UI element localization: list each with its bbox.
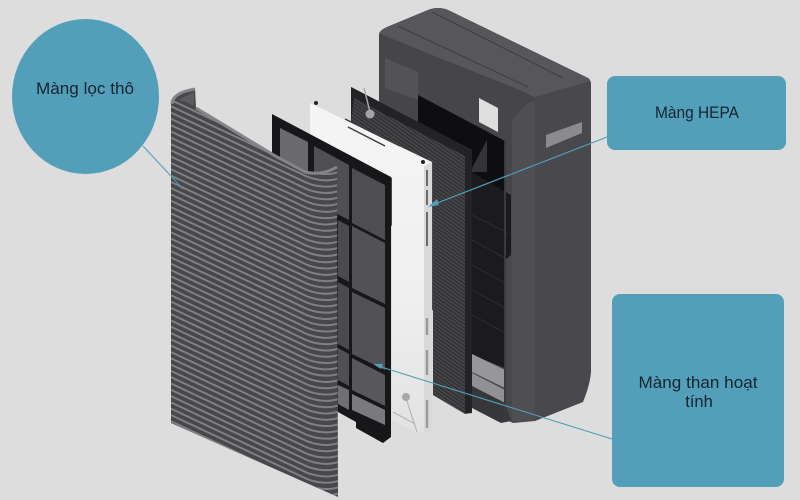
side handle recess — [546, 122, 582, 148]
body top surface — [379, 8, 590, 97]
callout: coarse filter — [12, 19, 159, 174]
printed marks on the filter — [345, 119, 427, 246]
carbon filter — [351, 87, 472, 414]
callout: HEPA filter — [607, 76, 786, 150]
body front face — [379, 34, 535, 421]
leader line: activated carbon filter with arrow — [373, 364, 612, 439]
black frame filter — [272, 114, 391, 443]
HEPA filter pull tab — [393, 393, 417, 432]
panel ribs — [171, 100, 338, 495]
front pre-filter panel — [171, 88, 338, 497]
filter cells — [352, 168, 385, 240]
label: activated carbon filter: Màng than hoạt — [638, 374, 758, 392]
white label square — [479, 98, 498, 132]
callout: activated carbon filter — [612, 294, 784, 487]
carbon filter pull tab — [364, 88, 374, 118]
lower grey bars — [472, 354, 505, 388]
air purifier body — [379, 8, 591, 423]
leader line: coarse filter — [143, 146, 183, 189]
label: coarse filter: Màng lọc thô — [36, 80, 134, 98]
label: activated carbon filter: tính — [685, 393, 713, 411]
HEPA white filter — [310, 101, 432, 433]
leader line: HEPA filter with arrow — [428, 137, 607, 207]
dark opening and mesh — [418, 95, 505, 368]
label: HEPA filter: Màng HEPA — [655, 104, 739, 122]
panel top lip — [172, 89, 337, 173]
